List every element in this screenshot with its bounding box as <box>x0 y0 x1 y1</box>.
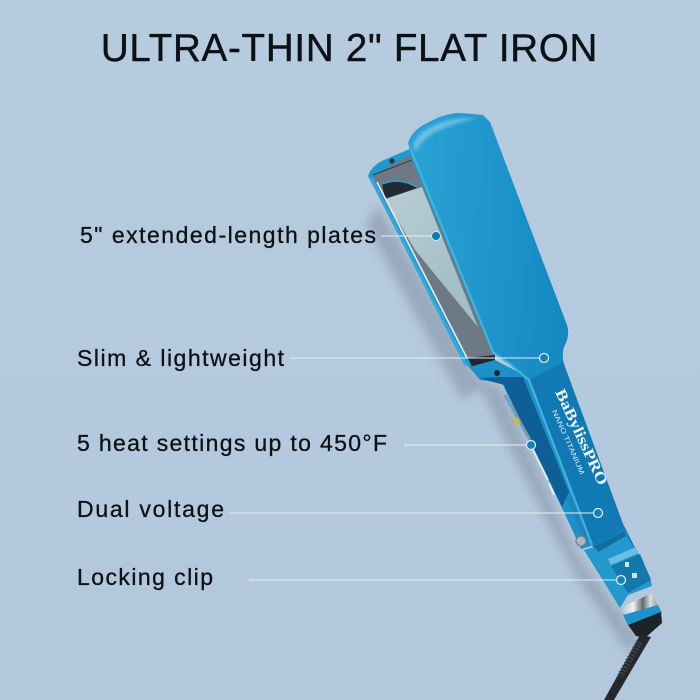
handle shading <box>528 362 630 547</box>
hinge pin <box>576 536 586 546</box>
label: dual voltage: Dual voltage <box>77 496 224 522</box>
lower handle <box>469 360 595 549</box>
label: heat settings <box>77 430 536 456</box>
label: slim and lightweight: Slim & lightweight <box>77 345 285 371</box>
label: extended-length plates: 5" extended-length plates <box>80 222 376 248</box>
hinge screw <box>389 158 395 164</box>
label: locking clip: Locking clip <box>77 564 213 590</box>
heat plate <box>385 187 478 327</box>
locking clip switch <box>611 554 651 593</box>
plate mount <box>382 182 417 199</box>
label: dual voltage <box>77 496 602 522</box>
upper arm <box>408 113 650 593</box>
cord boot <box>628 612 662 638</box>
title: ULTRA-THIN 2" FLAT IRON <box>101 27 598 70</box>
arm highlight <box>413 118 478 152</box>
label: heat settings: 5 heat settings up to 450°F <box>77 430 387 456</box>
control strip <box>505 395 530 440</box>
label: locking clip <box>77 564 626 590</box>
label: slim and lightweight <box>77 345 548 371</box>
brand text: BaBylissPRO <box>551 387 611 488</box>
shadow of iron <box>366 205 640 652</box>
handle side panel <box>566 495 592 544</box>
base collar <box>584 530 652 608</box>
sub-brand text: NANO TITANIUM <box>550 409 585 476</box>
lower arm edge <box>377 182 467 358</box>
lower arm <box>368 148 495 368</box>
cord <box>604 635 651 700</box>
metal ring <box>620 593 658 618</box>
blue neck <box>623 605 662 625</box>
black plate foot <box>468 355 495 369</box>
flat iron product <box>368 113 662 700</box>
